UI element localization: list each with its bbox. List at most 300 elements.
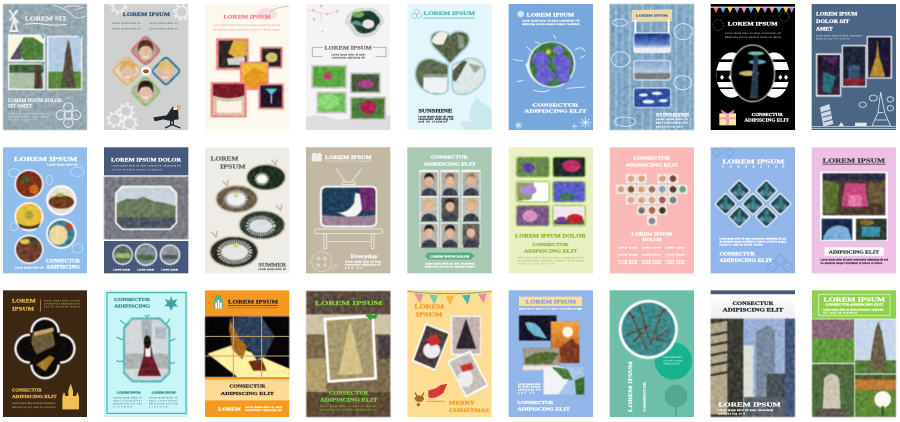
photo: plant xyxy=(523,348,559,370)
heading: Everyday xyxy=(351,254,378,260)
title: LOREM IPSUM xyxy=(14,156,77,163)
poster 17: blue diamonds xyxy=(711,147,795,273)
body text: do eiusmod tempor incididunt ut labore et dolore magna xyxy=(719,240,787,243)
heading: CONSECTUR xyxy=(46,260,81,265)
holly xyxy=(365,313,378,321)
column text: Lorem ipsum dolor sit xyxy=(113,397,142,400)
body text: Lorem ipsum dolor sit amet xyxy=(332,53,365,56)
photo: pagoda xyxy=(47,36,82,90)
title lines: DOLOR SIT xyxy=(816,20,850,25)
body text: sed do xyxy=(345,268,362,270)
poster 22: golden tree xyxy=(306,291,390,417)
portrait: bottom xyxy=(131,76,161,106)
column text xyxy=(113,397,178,409)
captions: Lorem ipsum xyxy=(113,268,130,271)
column text: adipiscing elit sed xyxy=(149,403,178,406)
photo: green cave xyxy=(856,219,887,240)
outlines decoration xyxy=(8,167,84,253)
photo 5 xyxy=(516,205,549,226)
title: LOREM IPSUM xyxy=(423,12,475,17)
body text: sit amet consec xyxy=(518,386,541,389)
tagline: Lorem ipsum dolor sit amet consectetur xyxy=(228,306,278,309)
body text: adipiscing elit sed do eiusmod tempor xyxy=(320,408,377,411)
photo oval 2 xyxy=(216,186,257,212)
body text: consectetur adipiscing elit xyxy=(44,303,80,306)
diamond outlines top xyxy=(712,148,734,157)
poster 27: green pagoda xyxy=(812,290,896,417)
body text xyxy=(656,118,688,128)
title: LOREM SIT xyxy=(25,16,67,23)
heading: CONSECTUR xyxy=(329,392,369,397)
column text: eiusmod xyxy=(149,407,168,409)
title: LOREM IPSUM xyxy=(526,300,576,305)
body text: adipiscing elit xyxy=(518,389,541,392)
branch xyxy=(270,6,289,11)
tagline: C O N S E C T U R xyxy=(722,167,785,169)
header band xyxy=(812,290,896,319)
body text: elit sed do eiusmod xyxy=(823,311,857,314)
heading: LOREM IPSUM xyxy=(631,232,672,237)
photo: snowman xyxy=(411,323,451,371)
body text: Lorem ipsum dolor sit amet consectetur adipiscing elit sed xyxy=(213,24,281,27)
photo 1 xyxy=(516,157,549,177)
body text: Lorem ipsum dolor sit xyxy=(149,22,178,25)
leaf sprigs xyxy=(513,35,585,92)
subtitle: ADIPISCING ELIT xyxy=(625,162,679,167)
body columns: Lorem ipsum xyxy=(642,247,661,250)
body text: do eiusmod tempor incididunt ut labore et dolore magna xyxy=(213,28,281,31)
body text xyxy=(213,24,281,31)
photo: flatbread xyxy=(46,218,77,249)
body text: adipiscing elit sed do eiusmod tempor xyxy=(8,115,50,118)
column text: Lorem ipsum dolor sit xyxy=(149,397,178,400)
body text: adipiscing elit sed do xyxy=(816,37,850,40)
photo: sculpture xyxy=(519,315,557,341)
title line 1: LOREM xyxy=(211,156,239,162)
heading panel xyxy=(711,294,795,319)
body columns: Lorem ipsum xyxy=(618,259,637,262)
body text: aliqua ut enim ad minim xyxy=(517,263,554,266)
photo 6 xyxy=(553,205,585,226)
body text: adipiscing sed do eiusmod tempor incididunt xyxy=(522,23,580,26)
clouds xyxy=(859,95,894,111)
white mat xyxy=(820,172,888,241)
gears xyxy=(107,0,189,131)
icon: windmill xyxy=(9,10,18,31)
photo: cave xyxy=(823,173,885,215)
diamond photo grid xyxy=(714,179,792,228)
photo: carousel egg xyxy=(731,45,775,102)
photo circle 2 xyxy=(135,243,157,266)
circle text xyxy=(663,356,683,366)
poster 26: glass tower xyxy=(711,290,795,417)
columns heading: LOREM IPSUM xyxy=(117,391,141,394)
panel background xyxy=(711,4,795,130)
body text: adipiscing elit sed do eiusmod tempor xyxy=(425,266,475,269)
body text: adipiscing elit xyxy=(718,412,745,415)
icon: film camera xyxy=(312,153,322,161)
TV antenna xyxy=(336,169,361,185)
poster 20: teal girl xyxy=(104,290,188,417)
photo: sky branches xyxy=(543,367,584,395)
body text xyxy=(332,53,365,59)
body text: Lorem ipsum dolor sit amet consectetur elit xyxy=(522,20,580,23)
body text: Lorem ipsum dolor sit amet xyxy=(44,300,80,303)
sprigs xyxy=(117,315,175,363)
body text: sed do xyxy=(518,393,535,395)
poster 21: orange night lights xyxy=(205,290,289,417)
table xyxy=(315,229,383,249)
body text xyxy=(12,402,56,409)
photo: mango xyxy=(240,62,269,90)
photo: skewer plate xyxy=(14,235,44,264)
body text xyxy=(522,20,580,26)
photo: clouds xyxy=(634,88,671,108)
body text: sed do eiusmod xyxy=(418,122,447,124)
body text: Lorem ipsum dolor sit amet consectetur xyxy=(320,405,377,408)
poster 19: brown palace xyxy=(3,290,87,417)
subtitle: CONSECTUR ADIPISCING ELIT xyxy=(825,303,883,307)
snowflakes xyxy=(515,117,591,129)
body text: do eiusmod tempor incididunt ut labore et dolore magna xyxy=(517,259,585,262)
firework left xyxy=(713,20,724,30)
title: CONSECTUR xyxy=(732,301,774,307)
poster 6: blue with violets xyxy=(509,4,593,130)
photo oval 4 xyxy=(210,237,258,267)
panel background xyxy=(407,290,492,417)
mountains xyxy=(306,115,390,130)
photo: framed tree xyxy=(323,314,377,383)
title lines xyxy=(816,13,858,33)
body columns: Lorem ipsum xyxy=(642,253,661,256)
poster 3: cream food collage xyxy=(205,4,289,130)
captions: Lorem ipsum xyxy=(137,268,154,271)
body columns: Lorem ipsum xyxy=(618,253,637,256)
subheading: ADIPISCING ELIT xyxy=(320,398,379,403)
portrait: top xyxy=(131,36,161,66)
panel background xyxy=(407,147,492,273)
photo: lily pad xyxy=(317,92,347,113)
panel background xyxy=(812,147,896,273)
portrait: left xyxy=(112,56,142,86)
column text: amet consectetur xyxy=(113,400,142,403)
vertical title: LOREM IPSUM xyxy=(628,361,634,412)
bottom band xyxy=(104,241,188,273)
title: LOREM IPSUM xyxy=(324,46,373,51)
body text xyxy=(112,22,178,31)
body text: consectetur adipiscing elit xyxy=(332,56,365,59)
poster 24: blue collage xyxy=(509,290,593,417)
body text xyxy=(821,259,889,265)
circle text: sit amet consec xyxy=(663,359,683,362)
heading: LOREM IPSUM DOLOR xyxy=(8,99,63,104)
body text xyxy=(112,165,181,171)
poster 10: food circles xyxy=(3,147,87,273)
body text: do eiusmod tempor incididunt ut labore et dolore xyxy=(821,262,883,265)
title squiggle xyxy=(25,23,67,25)
body text: sed do eiusmod tempor xyxy=(44,306,80,309)
photo: Christmas tree xyxy=(451,315,481,355)
bunting xyxy=(713,8,794,13)
heading frame xyxy=(312,47,386,57)
poster 14: portraits grid xyxy=(407,147,492,273)
body columns: Lorem ipsum xyxy=(666,253,684,256)
photo: stir fry xyxy=(14,169,44,199)
photo 3 xyxy=(516,181,549,202)
photo: garden flower xyxy=(855,375,896,417)
photo: corn xyxy=(14,202,44,231)
heading: SUNSHINE xyxy=(418,110,453,115)
body text: consectetur adipiscing elit xyxy=(345,264,381,267)
photo: blue cave xyxy=(822,219,852,240)
photo: sun xyxy=(551,321,579,363)
photo: heart left xyxy=(415,59,448,94)
title rule xyxy=(822,164,886,165)
photo: plate xyxy=(260,47,283,68)
side egg right xyxy=(759,52,789,98)
photo: neon building xyxy=(816,53,841,97)
body text: adipiscing elit sed do eiusmod xyxy=(12,406,56,409)
heading: CONSECTUR xyxy=(752,112,783,117)
body columns xyxy=(618,247,684,265)
title: LOREM IPSUM xyxy=(527,13,574,18)
poster 9: Paris night xyxy=(812,4,896,130)
columns heading xyxy=(117,391,176,394)
panel background xyxy=(711,147,795,273)
caption: Lorem ipsum dolor sit xyxy=(258,268,286,271)
businessman in chair xyxy=(153,105,181,128)
orange strip xyxy=(205,377,289,380)
portrait row 2 xyxy=(419,196,481,221)
vertical rule xyxy=(39,299,42,311)
ground lines xyxy=(812,122,896,129)
logo rings xyxy=(412,9,422,18)
heading: MERRY xyxy=(449,402,475,407)
body text: incididunt ut labore xyxy=(8,118,39,121)
body text: Lorem ipsum dolor sit amet consectetur adipiscing elit xyxy=(112,165,181,168)
accent circle xyxy=(655,342,692,380)
body text: Lorem ipsum dolor sit amet consectetur xyxy=(425,262,475,265)
photo: heart top xyxy=(431,31,469,63)
poster 2: grey portraits xyxy=(104,0,189,131)
poster 13: everyday TV xyxy=(306,147,390,273)
body text xyxy=(719,237,787,246)
icon: temple silhouette xyxy=(62,383,79,409)
title: CONSECTUR xyxy=(431,154,468,159)
body text xyxy=(44,300,80,309)
title: LOREM IPSUM xyxy=(315,300,382,307)
title: LOREM IPSUM xyxy=(123,12,171,18)
leaf ornament xyxy=(470,98,492,129)
diamond outlines bottom xyxy=(767,254,793,272)
decorative reels xyxy=(312,252,338,272)
body text xyxy=(425,262,475,269)
texture band xyxy=(104,177,188,239)
panel background xyxy=(509,4,593,130)
title line 1: LOREM xyxy=(12,300,36,305)
body columns: Lorem ipsum xyxy=(618,247,637,250)
panel background xyxy=(104,4,188,130)
bunting xyxy=(407,291,492,306)
title rule: Lorem ipsum dolor sit xyxy=(523,308,577,311)
blossom branch xyxy=(307,5,339,33)
title line 2: IPSUM xyxy=(416,312,443,318)
panel background xyxy=(407,4,492,130)
body text: Lorem ipsum dolor sit amet consectetur adipiscing elit sed xyxy=(719,237,787,240)
heading: SUMMER xyxy=(258,264,286,269)
subheading: DOLOR xyxy=(642,237,663,242)
pink blot xyxy=(257,8,277,20)
label box: ADIPISCING ELIT xyxy=(829,249,879,254)
panel background xyxy=(306,4,390,130)
photo oval 3 xyxy=(239,211,285,239)
poster 15: green flowers grid xyxy=(509,147,593,273)
body text xyxy=(8,112,50,121)
sleigh and reindeer xyxy=(415,384,447,406)
circle text: adipiscing elit xyxy=(663,363,680,366)
title line 1: LOREM xyxy=(414,304,444,310)
photo: dessert xyxy=(216,38,249,70)
photo background xyxy=(306,291,390,417)
top strip xyxy=(711,6,795,9)
body columns: Lorem ipsum xyxy=(666,262,684,265)
photo: glowing floor xyxy=(205,316,289,377)
photo 4 xyxy=(553,181,585,202)
heading: CONSECTUR xyxy=(12,388,42,393)
ribbon corners xyxy=(40,34,82,67)
photo: tree xyxy=(8,34,45,62)
cream band xyxy=(205,380,289,400)
top band xyxy=(711,290,795,294)
panel background xyxy=(3,147,87,273)
body text: Lorem ipsum dolor sit amet consectetur adipiscing xyxy=(823,308,884,311)
body text: Lorem ipsum dolor sit amet consectetur adipiscing elit sed xyxy=(821,259,889,262)
poster 1: grey botanical xyxy=(3,4,87,130)
photo: lotus blob xyxy=(346,9,383,36)
body text: Lorem ipsum dolor sit amet xyxy=(418,115,454,118)
title line 2: IPSUM xyxy=(220,165,246,171)
subheading: ADIPISCING ELIT xyxy=(744,118,789,123)
TV with dove photo xyxy=(320,186,377,227)
icon: leaning tower xyxy=(820,104,833,127)
body text: Lorem ipsum dolor sit amet consectetur xyxy=(718,409,774,412)
heading: LOREM IPSUM DOLOR xyxy=(515,235,587,240)
photo: violet blossoms xyxy=(350,73,381,93)
panel background xyxy=(104,290,188,417)
title: LOREM IPSUM xyxy=(722,159,784,166)
snowflake icon xyxy=(517,11,524,17)
photo: stone carving xyxy=(812,364,854,417)
captions: Lorem ipsum xyxy=(161,268,178,271)
panel background xyxy=(610,4,694,130)
column text: adipiscing elit sed xyxy=(113,403,142,406)
panel background xyxy=(3,290,87,417)
body text xyxy=(823,308,884,314)
panel background xyxy=(610,147,694,273)
title: LOREM IPSUM xyxy=(223,15,271,20)
subheading: CONSECTUR xyxy=(532,242,569,247)
body text: Lorem ipsum dolor sit amet consectetur xyxy=(8,112,50,115)
poster 8: black eggs xyxy=(711,4,795,130)
panel background xyxy=(509,147,593,273)
body columns: Lorem ipsum xyxy=(618,262,637,265)
body text xyxy=(718,409,774,415)
tree icon xyxy=(665,385,687,417)
title label xyxy=(519,297,582,306)
circle text: Lorem ipsum dolor xyxy=(663,356,682,359)
subheading 2: ADIPISCING ELIT xyxy=(524,248,577,253)
photo circle 3 xyxy=(160,244,180,265)
tagline bottom: Lorem ipsum dolor sit xyxy=(15,267,44,270)
poster 12: chrysanthemums xyxy=(205,147,289,273)
subtitle: ADIPISCING ELIT xyxy=(723,308,784,314)
subheading: ADIPISCING ELIT xyxy=(524,108,587,113)
title: LOREM IPSUM xyxy=(823,297,885,303)
subheading: ADIPISCING ELIT xyxy=(221,391,274,396)
title: LOREM IPSUM xyxy=(228,301,278,306)
cloud outlines xyxy=(612,19,693,126)
body text xyxy=(517,256,585,266)
header outline xyxy=(819,294,890,315)
title: LOREM IPSUM xyxy=(823,157,885,164)
subheading: ADIPISCING ELIT xyxy=(517,406,570,411)
body text xyxy=(345,261,381,270)
portrait: right xyxy=(151,56,181,86)
panel background xyxy=(205,4,289,130)
heading: CONSECTUR xyxy=(532,102,580,107)
small leaf xyxy=(460,121,483,130)
poster 11: landscape navy xyxy=(104,147,188,273)
captions xyxy=(113,268,178,271)
photo: ocean sky xyxy=(634,33,671,53)
photo circle 1 xyxy=(112,244,133,265)
title rule xyxy=(228,304,278,307)
body text: sed do eiusmod tempor incididunt xyxy=(112,168,162,171)
photo: pagoda xyxy=(855,319,896,374)
photo: lake tree xyxy=(8,63,45,90)
subheading: ADIPISCING ELIT xyxy=(719,259,773,264)
body text: Lorem ipsum dolor sit amet consectetur elit xyxy=(725,32,781,35)
poster 18: pink cave xyxy=(812,147,896,273)
heading overlay: LOREM IPSUM xyxy=(718,401,781,408)
photo: beach xyxy=(634,60,671,80)
title: CONSECTUR xyxy=(633,156,670,161)
subheading: ADIPISCING xyxy=(46,266,80,271)
photo: girl xyxy=(124,319,169,381)
panel background xyxy=(610,290,694,417)
body text xyxy=(320,405,377,411)
body text xyxy=(725,32,782,39)
subtitle: ADIPISCING ELIT xyxy=(423,161,476,166)
panel background xyxy=(306,147,390,273)
footer label: LOREM xyxy=(218,406,241,411)
photo oval 1 xyxy=(247,165,285,190)
body columns: Lorem ipsum xyxy=(642,262,661,265)
bottom band xyxy=(205,400,289,417)
poster 16: pink heart of faces xyxy=(610,147,694,273)
body text: amet consectetur elit xyxy=(656,122,688,125)
poster 4: lotus flowers xyxy=(306,4,390,130)
photo: branches over water xyxy=(619,300,678,359)
portrait row 3 xyxy=(419,222,481,248)
top band xyxy=(205,290,289,316)
body text: Lorem ipsum dolor sit amet xyxy=(345,261,381,264)
body text xyxy=(816,34,863,40)
column text: amet consectetur xyxy=(149,400,178,403)
firework right xyxy=(780,12,789,21)
body text: Lorem ipsum dolor xyxy=(518,383,541,386)
body text: aliqua ut enim ad minim veniam xyxy=(719,243,763,246)
